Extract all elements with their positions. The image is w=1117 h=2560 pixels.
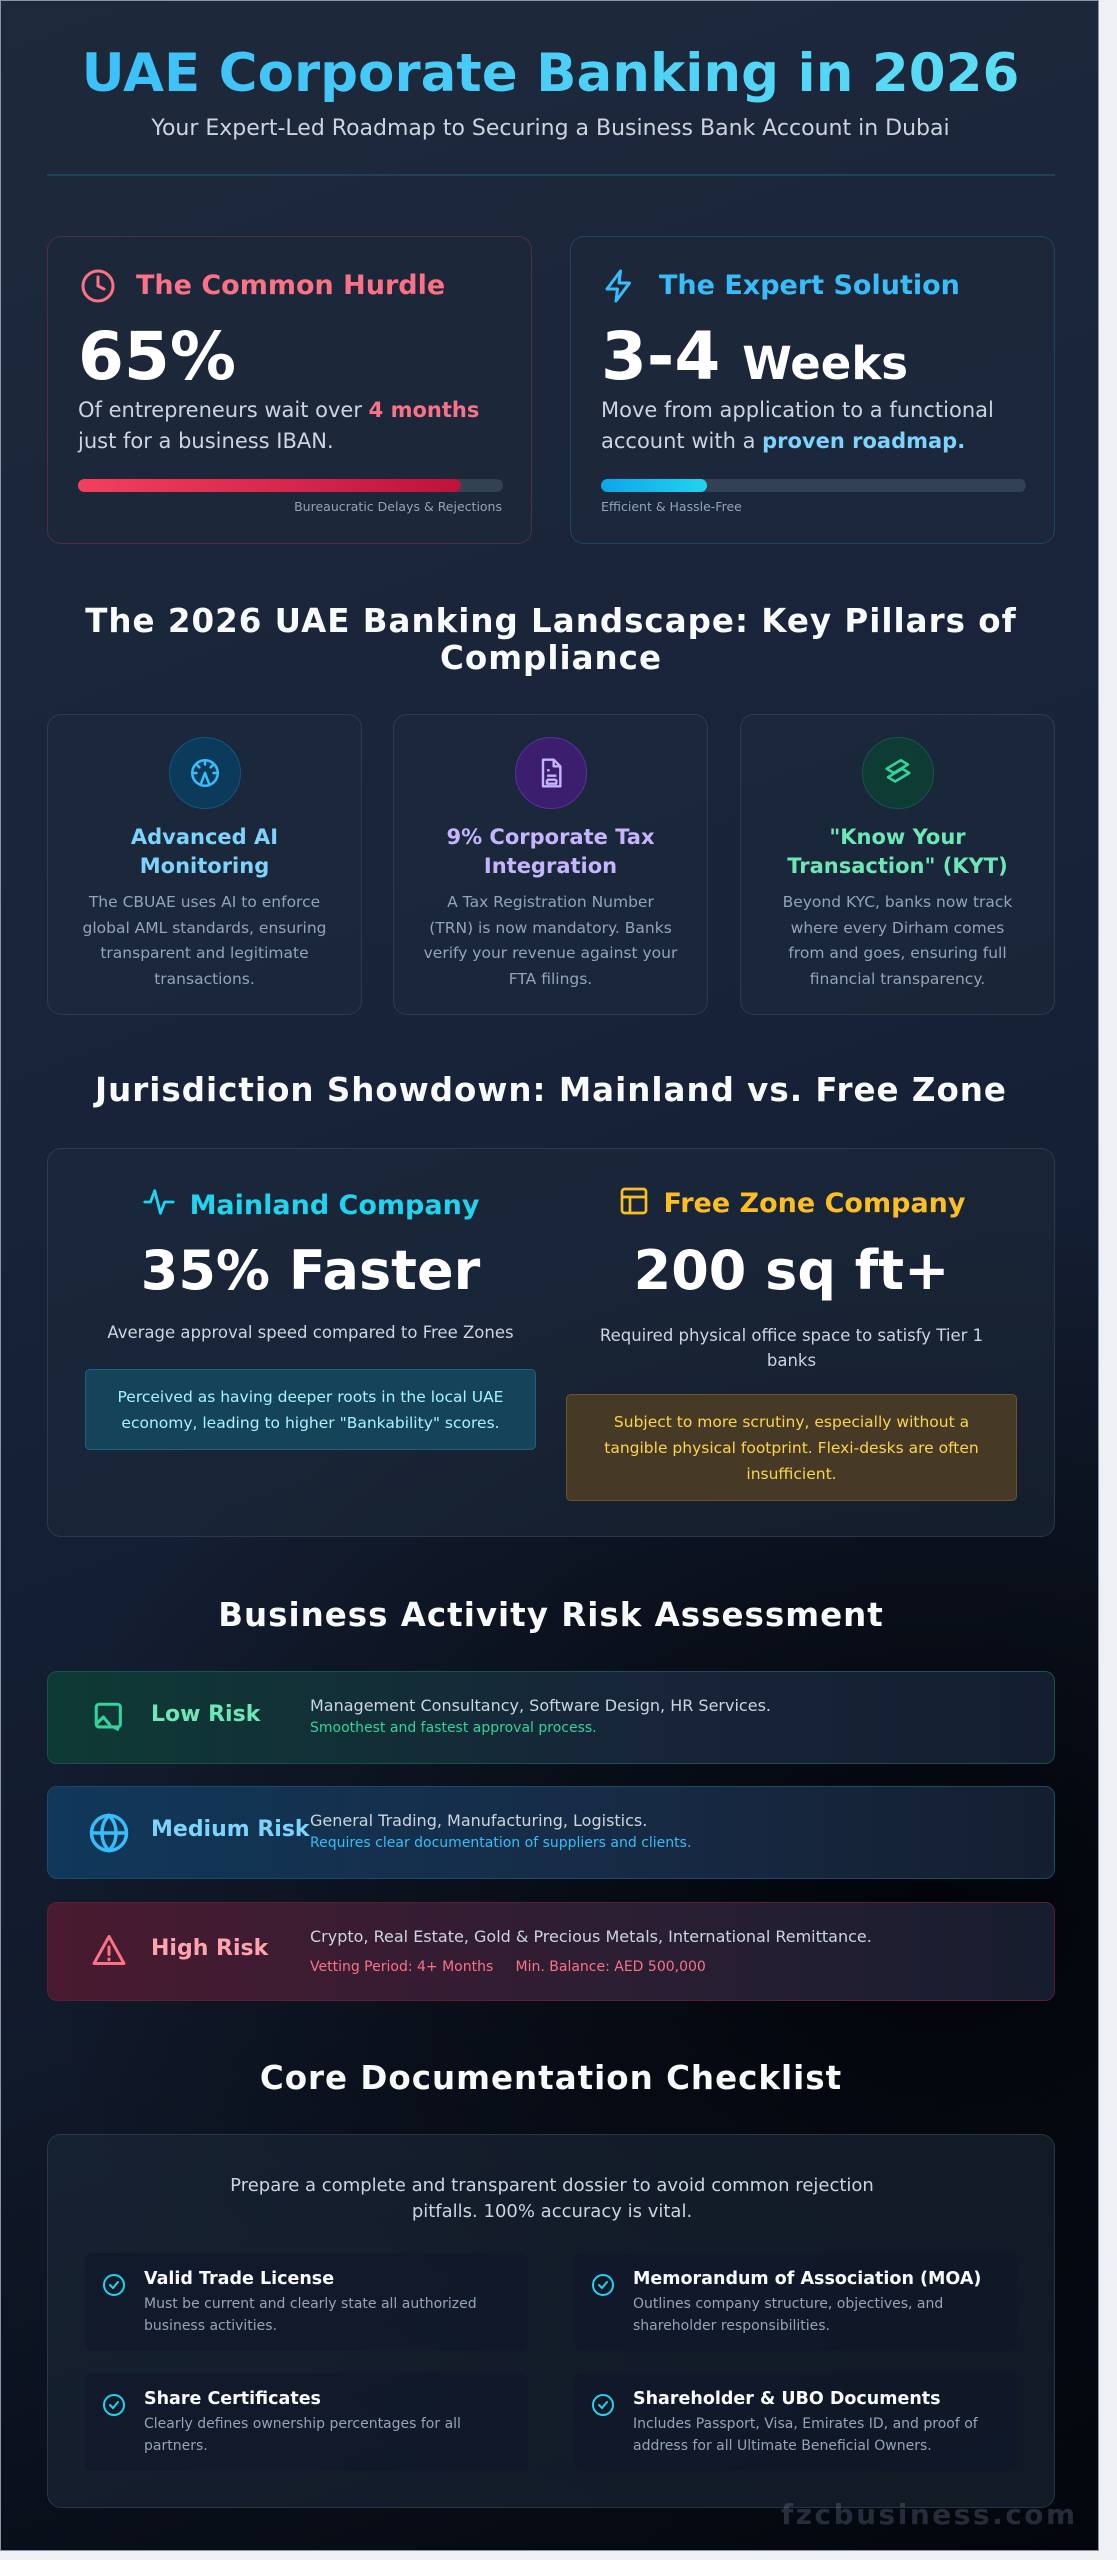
panel: checklist (47, 2134, 1055, 2508)
risk: high (47, 1902, 1055, 2001)
heading: expert solution: The Expert Solution (659, 270, 960, 301)
risk: low (47, 1671, 1055, 1764)
item: share certificates: Clearly defines ownership percentages for all partners. (144, 2416, 461, 2454)
risk: high: High Risk (151, 1936, 268, 1961)
risk: low: Smoothest and fastest approval process. (310, 1720, 597, 1736)
risk: medium: General Trading, Manufacturing, Logistics. (310, 1811, 647, 1830)
callout: free zone: Subject to more scrutiny, especially without a tangible physical footprint. Flexi-desks are often insufficient. (604, 1413, 979, 1483)
risk: low: Low Risk (151, 1702, 260, 1727)
heading: common hurdle: The Common Hurdle (136, 270, 445, 301)
subtitle: Your Expert-Led Roadmap to Securing a Business Bank Account in Dubai (151, 116, 950, 141)
panel: common hurdle: Bureaucratic Delays & Rejections (294, 499, 502, 514)
risk: high: Vetting Period: 4+ Months Min. Balance: AED 500,000 (310, 1959, 706, 1975)
icon: globe (90, 1813, 128, 1853)
heading: landscape: The 2026 UAE Banking Landscape: Key Pillars of (85, 602, 1017, 640)
pillar: KYT: financial transparency. (810, 970, 985, 988)
column: free zone (566, 1188, 1017, 1501)
item: share certificates (85, 2373, 528, 2471)
bar (78, 479, 503, 492)
risk: high: Crypto, Real Estate, Gold & Precious Metals, International Remittance. (310, 1927, 872, 1946)
heading: checklist: Core Documentation Checklist (260, 2059, 842, 2097)
icon: image (94, 1702, 122, 1732)
item: MOA: Outlines company structure, objectives, and shareholder responsibilities. (633, 2296, 943, 2334)
icon: warning (92, 1934, 126, 1965)
stat: 200 sq ft+ (634, 1239, 949, 1302)
text: Of entrepreneurs wait over 4 months (78, 398, 479, 422)
heading: jurisdiction: Jurisdiction Showdown: Mainland vs. Free Zone (95, 1071, 1007, 1109)
item: UBO documents (574, 2373, 1017, 2471)
text (78, 398, 479, 453)
item: trade license: Must be current and clearly state all authorized business activities. (144, 2296, 477, 2334)
heading: mainland: Mainland Company (190, 1190, 479, 1221)
pillar: KYT: where every Dirham comes (791, 918, 1004, 936)
text: account with a proven roadmap. (601, 429, 965, 453)
pillar: KYT: Beyond KYC, banks now track (783, 893, 1012, 911)
watermark: fzcbusiness.com (781, 2498, 1078, 2531)
item: MOA (574, 2253, 1017, 2351)
text: just for a business IBAN. (78, 429, 334, 453)
icon: document (515, 737, 587, 809)
pillar: AI monitoring: Monitoring (140, 854, 269, 878)
icon: transfer (862, 737, 934, 809)
item: MOA: Memorandum of Association (MOA) (633, 2269, 981, 2289)
panel: expert solution (570, 236, 1055, 544)
icon: bolt (605, 270, 632, 302)
title: UAE Corporate Banking in 2026 (82, 43, 1019, 104)
column: mainland: Average approval speed compared to Free Zones (107, 1323, 514, 1342)
item: share certificates: Share Certificates (144, 2389, 321, 2409)
stat: 3-4 weeks: 3-4 Weeks (601, 318, 908, 395)
pillar: AI monitoring: Advanced AI (131, 825, 278, 849)
pillar: corporate tax: A Tax Registration Number (447, 893, 654, 911)
callout: free zone (566, 1394, 1017, 1501)
pillar: AI monitoring (47, 714, 362, 1015)
item: UBO documents: Includes Passport, Visa, Emirates ID, and proof of address for all Ultimate Beneficial Owners. (633, 2416, 978, 2454)
panel: common hurdle (47, 236, 532, 544)
callout: mainland: Perceived as having deeper roots in the local UAE economy, leading to higher "Bankability" scores. (118, 1388, 503, 1432)
panel: jurisdiction (47, 1148, 1055, 1537)
pillar: corporate tax (393, 714, 708, 1015)
pillar: KYT: from and goes, ensuring full (788, 944, 1007, 962)
intro text: Prepare a complete and transparent dossier to avoid common rejection pitfalls. 100% accuracy is vital. (230, 2175, 874, 2222)
heading: landscape (85, 602, 1017, 677)
pillar: corporate tax: Integration (484, 854, 617, 878)
pillar: KYT: Transaction" (KYT) (787, 854, 1008, 878)
pillar: KYT (740, 714, 1055, 1015)
heading: free zone: Free Zone Company (664, 1188, 965, 1219)
stat: 35% Faster (141, 1239, 480, 1302)
item: UBO documents: Shareholder & UBO Documents (633, 2389, 941, 2409)
stat: 65%: 65% (78, 318, 236, 395)
icon: gauge (169, 737, 241, 809)
bar (601, 479, 1026, 492)
callout: mainland (85, 1369, 536, 1450)
column: free zone: banks (767, 1351, 816, 1370)
icon: clock (82, 270, 114, 302)
text (601, 398, 994, 453)
heading: landscape: Compliance (440, 639, 662, 677)
item: trade license (85, 2253, 528, 2351)
column: free zone: Required physical office space to satisfy Tier 1 (600, 1326, 983, 1345)
risk: medium: Requires clear documentation of suppliers and clients. (310, 1835, 691, 1851)
pillar: corporate tax: (TRN) is now mandatory. Banks verify your revenue against your FTA filings. (424, 918, 677, 988)
column: mainland (85, 1189, 536, 1450)
pillar: KYT: "Know Your (829, 825, 966, 849)
risk: medium (47, 1786, 1055, 1879)
pillar: corporate tax: 9% Corporate Tax (446, 825, 655, 849)
heading: risk: Business Activity Risk Assessment (218, 1596, 884, 1634)
panel: expert solution: Efficient & Hassle-Free (601, 499, 742, 514)
item: trade license: Valid Trade License (144, 2269, 334, 2289)
risk: low: Management Consultancy, Software Design, HR Services. (310, 1696, 771, 1715)
text: Move from application to a functional (601, 398, 994, 422)
pillar: AI monitoring: The CBUAE uses AI to enforce global AML standards, ensuring transparent and legitimate transactions. (82, 893, 327, 988)
risk: medium: Medium Risk (151, 1817, 310, 1842)
